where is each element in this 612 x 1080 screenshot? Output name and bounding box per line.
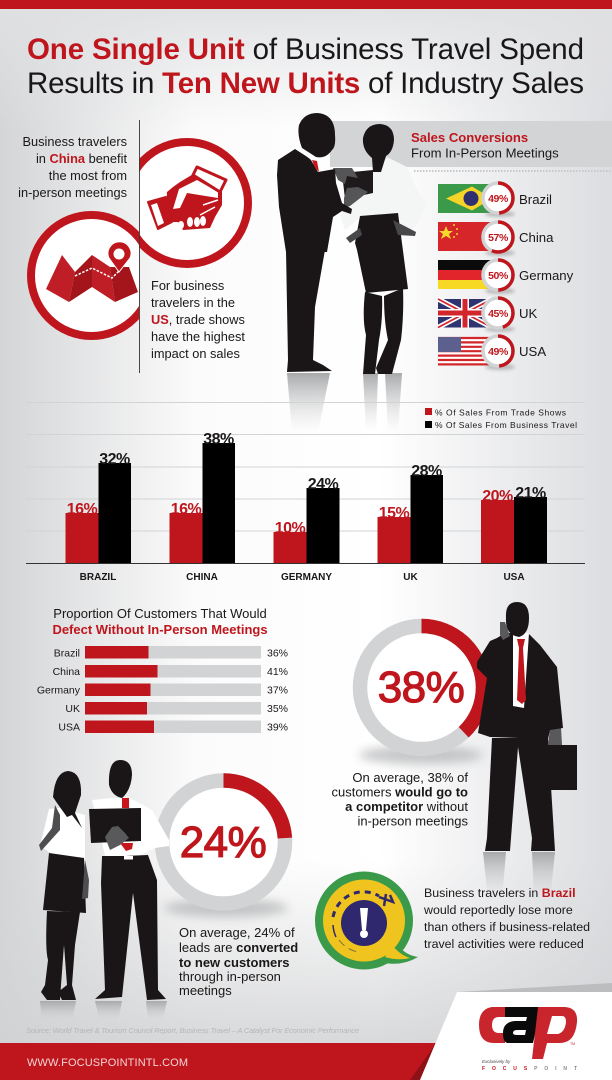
bars: China: 16% bbox=[171, 501, 202, 518]
text: 24 percent caption: On average, 24% of bbox=[179, 925, 295, 940]
text: China callout: the most from bbox=[49, 168, 127, 183]
heading: Defect Without In-Person Meetings bbox=[52, 622, 268, 637]
text: 38 percent caption: customers would go to bbox=[332, 784, 468, 800]
flag: USA bbox=[438, 337, 492, 366]
panel: sales conversions band: From In-Person Meetings bbox=[411, 146, 559, 160]
flag: Germany bbox=[438, 260, 492, 289]
text: US callout: have the highest bbox=[151, 329, 245, 344]
footer bar: WWW.FOCUSPOINTINTL.COM bbox=[27, 1057, 188, 1069]
bar: UK 35%: 35% bbox=[267, 703, 288, 715]
title bbox=[27, 33, 584, 100]
bars: USA: 20% bbox=[482, 488, 513, 505]
text: 38 percent caption bbox=[332, 770, 468, 828]
bar: USA 39% bbox=[58, 720, 288, 734]
text: China callout bbox=[18, 134, 127, 200]
divider line bbox=[138, 120, 140, 373]
bars: Germany bbox=[274, 476, 340, 563]
man bbox=[89, 760, 169, 1000]
text: Brazil callout: than others if business-related bbox=[424, 920, 590, 934]
icon: map circle bbox=[31, 215, 152, 336]
silhouette: man on phone with briefcase bbox=[477, 602, 577, 900]
donut: 24 percent: 24% bbox=[180, 818, 266, 867]
heading bbox=[52, 606, 268, 637]
bar: China 41%: China bbox=[53, 666, 80, 678]
bars: Germany: 10% bbox=[275, 520, 306, 537]
text: US callout bbox=[151, 278, 245, 361]
bars: USA bbox=[481, 485, 547, 563]
legend: % Of Sales From Business Travel bbox=[435, 420, 577, 430]
bar: UK 35% bbox=[65, 702, 288, 715]
gauge: China 57% bbox=[482, 220, 515, 256]
source note: Source: World Travel & Tourism Council Report, Business Travel – A Catalyst For Economic Performance bbox=[26, 1026, 359, 1035]
bar: Brazil 36%: 36% bbox=[267, 648, 288, 660]
logo: cap: TM bbox=[570, 1042, 575, 1046]
panel: sales conversions band: Sales Conversions bbox=[411, 130, 528, 145]
text: 38 percent caption: a competitor without bbox=[345, 799, 468, 814]
footer bar bbox=[0, 1043, 436, 1080]
bars: UK: 28% bbox=[411, 463, 442, 480]
title: Results in Ten New Units of Industry Sales bbox=[27, 67, 584, 100]
bars: China: 38% bbox=[203, 431, 234, 448]
text: 38 percent caption: On average, 38% of bbox=[352, 770, 468, 785]
country names: Brazil bbox=[519, 192, 552, 207]
bar: Germany 37%: Germany bbox=[37, 684, 81, 696]
gauge: USA 49% bbox=[482, 334, 515, 370]
country names: Germany bbox=[519, 268, 574, 283]
bar: UK 35%: UK bbox=[65, 703, 80, 715]
gauge: UK 45% bbox=[482, 296, 515, 332]
bar: China 41% bbox=[53, 665, 288, 678]
bar chart: sales by country bbox=[26, 402, 585, 583]
gauge: Brazil 49% bbox=[482, 182, 515, 217]
text: 24 percent caption: meetings bbox=[179, 983, 232, 998]
heading: Proportion Of Customers That Would bbox=[53, 606, 267, 621]
country names: USA bbox=[519, 344, 546, 359]
gauge: China 57%: 57% bbox=[488, 232, 509, 244]
logo panel bbox=[420, 983, 612, 1080]
text: 24 percent caption: through in-person bbox=[179, 969, 281, 984]
panel: sales conversions band bbox=[330, 121, 612, 171]
text: China callout: in-person meetings bbox=[18, 185, 127, 200]
bar: USA 39%: 39% bbox=[267, 722, 288, 734]
gauge: Germany 50%: 50% bbox=[488, 270, 509, 282]
country names: UK bbox=[519, 306, 538, 321]
axis labels bbox=[80, 572, 525, 583]
text: China callout: Business travelers bbox=[22, 134, 127, 149]
bar: China 41%: 41% bbox=[267, 666, 288, 678]
flag: UK bbox=[438, 299, 492, 328]
flag: Brazil bbox=[438, 184, 492, 213]
text: US callout: For business bbox=[151, 278, 224, 293]
sales conversion list bbox=[438, 182, 574, 370]
icon: handshake circle bbox=[126, 142, 248, 264]
text: 24 percent caption: leads are converted bbox=[179, 940, 298, 955]
bars: Brazil: 16% bbox=[67, 501, 98, 518]
gauge: USA 49%: 49% bbox=[488, 346, 509, 358]
gauge: Brazil 49%: 49% bbox=[488, 193, 509, 205]
axis labels: USA bbox=[503, 572, 525, 583]
panel: customer defection bars bbox=[37, 606, 288, 734]
bars: USA: 21% bbox=[515, 485, 546, 502]
man bbox=[277, 113, 352, 372]
country names bbox=[519, 192, 574, 359]
bars: Brazil bbox=[66, 451, 131, 563]
text: Brazil callout: Business travelers in Brazil bbox=[424, 886, 576, 900]
text: 24 percent caption bbox=[179, 925, 298, 998]
text: China callout: in China benefit bbox=[36, 151, 127, 166]
bar: Brazil 36%: Brazil bbox=[54, 648, 80, 660]
bars: China bbox=[170, 431, 235, 563]
text: Brazil callout: would reportedly lose more bbox=[423, 903, 573, 917]
axis labels: GERMANY bbox=[281, 572, 332, 583]
woman bbox=[39, 771, 89, 1000]
bar: USA 39%: USA bbox=[58, 722, 80, 734]
legend bbox=[425, 408, 577, 430]
gauge: UK 45%: 45% bbox=[488, 308, 509, 320]
axis labels: UK bbox=[403, 572, 418, 583]
bars: Brazil: 32% bbox=[99, 451, 130, 468]
gauge: Germany 50% bbox=[482, 258, 515, 294]
silhouette: business couple bbox=[277, 113, 427, 432]
bar: Brazil 36% bbox=[54, 646, 288, 660]
donut: 38 percent: 38% bbox=[378, 663, 464, 712]
icon: Brazil speech bubble bbox=[315, 872, 418, 970]
bar: Germany 37% bbox=[37, 684, 288, 696]
country names: China bbox=[519, 230, 554, 245]
text: Brazil callout bbox=[423, 886, 590, 951]
text: 38 percent caption: in-person meetings bbox=[357, 814, 468, 828]
text: US callout: US, trade shows bbox=[151, 312, 245, 327]
text: US callout: impact on sales bbox=[151, 346, 240, 361]
bar: Germany 37%: 37% bbox=[267, 684, 288, 696]
logo: cap: Exclusively by bbox=[482, 1059, 511, 1064]
axis labels: CHINA bbox=[186, 572, 218, 583]
logo: cap: FOCUS POINT bbox=[482, 1066, 577, 1072]
donut: 24 percent bbox=[162, 780, 288, 917]
donut: 38 percent bbox=[359, 626, 483, 764]
text: Brazil callout: travel activities were reduced bbox=[424, 937, 584, 951]
legend: % Of Sales From Trade Shows bbox=[435, 408, 566, 418]
bars: Germany: 24% bbox=[308, 476, 339, 493]
axis labels: BRAZIL bbox=[80, 572, 116, 583]
text: US callout: travelers in the bbox=[151, 295, 235, 310]
silhouette: couple with tablet bbox=[39, 760, 169, 1022]
title: One Single Unit of Business Travel Spend bbox=[27, 33, 584, 66]
bars: UK: 15% bbox=[379, 505, 410, 522]
text: 24 percent caption: to new customers bbox=[179, 955, 290, 970]
flag: China bbox=[438, 222, 492, 251]
logo: cap bbox=[479, 1007, 577, 1072]
woman bbox=[340, 124, 427, 374]
bars: UK bbox=[378, 463, 443, 563]
